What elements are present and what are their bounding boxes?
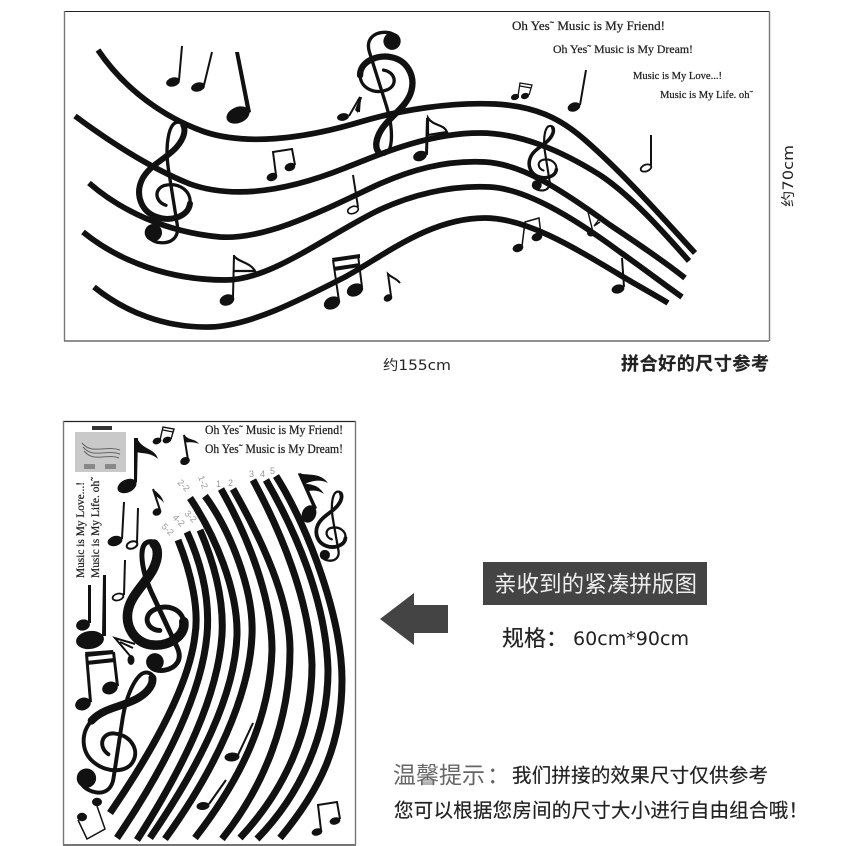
panel: assembled size reference: [64, 11, 770, 342]
text: lyrics: Music is My Life. oh˜: [660, 90, 754, 101]
labels: strip numbers: 1: [216, 479, 221, 489]
text: lyrics horizontal: Oh Yes˜ Music is My Friend!: [205, 423, 343, 437]
text: tip: [393, 762, 808, 822]
staff lines: five wavy lines: [75, 50, 695, 327]
labels: strip numbers: 5: [270, 466, 275, 476]
banner: compact layout heading: [483, 562, 707, 605]
staff strips: ten curved bands: [110, 476, 342, 840]
text: lyrics: Music is My Love...!: [633, 71, 722, 82]
icon: lower treble clef: [69, 660, 160, 801]
labels: strip numbers: 1-2: [196, 474, 210, 490]
panel: compact layout sheet: [63, 421, 356, 845]
labels: strip numbers: [160, 466, 275, 538]
labels: strip numbers: 3: [249, 469, 254, 479]
text: lyrics vertical: [73, 477, 102, 578]
icon: big treble clef: [108, 539, 195, 676]
icon: large treble clef left: [139, 122, 190, 243]
text: lyrics vertical: Music is My Love...!: [73, 482, 87, 578]
labels: strip numbers: 5-2: [160, 521, 176, 538]
labels: strip numbers: 4-2: [171, 512, 187, 529]
text: sheet specification: 规格：: [502, 626, 568, 651]
labels: strip numbers: 4: [260, 469, 265, 479]
text: tip: ：: [487, 762, 510, 788]
text: tip: 您可以根据您房间的尺寸大小进行自由组合哦！: [394, 800, 808, 822]
text: lyrics horizontal: [205, 423, 343, 456]
icon: inverted treble clef centre: [354, 29, 422, 156]
text: tip: 我们拼接的效果尺寸仅供参考: [512, 765, 768, 787]
label: width: 约155cm: [383, 358, 451, 374]
labels: strip numbers: 2: [228, 478, 233, 488]
thumbnail: product photo: [75, 426, 126, 472]
icon: left arrow: [380, 593, 448, 645]
text: sheet specification: [502, 626, 689, 651]
icon: small upper treble clef: [316, 492, 346, 561]
label: height: 约70cm: [781, 145, 797, 207]
text: sheet specification: 60cm*90cm: [573, 628, 689, 650]
text: lyrics: [512, 18, 754, 101]
icon: small treble clef right: [529, 126, 556, 190]
banner: compact layout heading: 亲收到的紧凑拼版图: [494, 572, 697, 597]
icons: loose notes: [73, 427, 341, 839]
text: lyrics horizontal: Oh Yes˜ Music is My Dream!: [205, 442, 343, 456]
text: tip: 温馨提示: [393, 762, 485, 788]
caption: assembled size reference: 拼合好的尺寸参考: [621, 353, 769, 374]
text: lyrics: Oh Yes˜ Music is My Dream!: [553, 42, 693, 56]
icons: music notes: [165, 46, 652, 312]
text: lyrics vertical: Music is My Life. oh˜: [88, 477, 102, 578]
labels: strip numbers: 3-2: [183, 508, 199, 525]
text: lyrics: Oh Yes˜ Music is My Friend!: [512, 18, 665, 33]
labels: strip numbers: 2-2: [176, 477, 192, 494]
